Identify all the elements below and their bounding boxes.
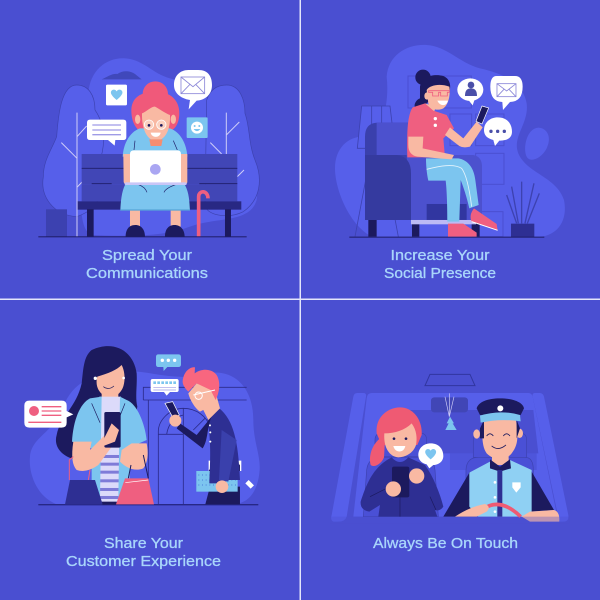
panel: spread your communications — [38, 58, 259, 282]
bubble: dots — [484, 117, 512, 146]
torso — [123, 128, 187, 157]
ears — [473, 429, 480, 439]
dashboard — [330, 517, 570, 523]
windshield — [353, 393, 557, 517]
hair — [56, 346, 137, 460]
woman passenger — [361, 407, 443, 517]
cane — [199, 192, 208, 237]
heading: Share Your — [104, 536, 183, 552]
icon: heart card — [106, 85, 127, 105]
illustration: shoppers with phones — [24, 346, 260, 505]
driver — [443, 398, 559, 522]
jacket — [361, 457, 443, 517]
bag pink — [128, 455, 148, 478]
woman — [56, 346, 154, 505]
panel: share customer experience — [24, 346, 260, 570]
left pillar — [331, 393, 366, 522]
panel: always be on touch — [330, 374, 570, 552]
man — [165, 367, 241, 504]
bench back — [82, 154, 237, 201]
ground — [38, 235, 247, 238]
hair back — [143, 81, 168, 107]
heading: Always Be On Touch — [373, 536, 518, 552]
armchair — [365, 123, 482, 237]
striped top — [99, 397, 121, 502]
face — [97, 365, 125, 397]
rear window — [403, 410, 538, 453]
bench seat and legs — [78, 201, 241, 210]
plant — [507, 182, 539, 237]
arms — [408, 137, 454, 159]
price tag — [245, 480, 254, 489]
laptop — [130, 150, 181, 183]
cardigan — [72, 397, 147, 500]
face — [384, 423, 417, 457]
skirt — [120, 185, 190, 211]
neck and face — [427, 85, 450, 110]
bubble: text — [87, 120, 126, 146]
heading: Increase Your — [390, 248, 490, 264]
arms — [123, 154, 187, 185]
heading — [384, 248, 496, 282]
background blob — [335, 45, 565, 237]
bag navy — [69, 457, 90, 480]
neck and head — [195, 390, 220, 420]
trousers — [205, 487, 240, 504]
heading: Spread Your — [102, 248, 192, 264]
background blob — [81, 58, 257, 236]
legs and shoes — [130, 208, 181, 227]
bubble: mail — [174, 70, 212, 109]
phone — [476, 106, 489, 124]
hair back — [415, 70, 431, 85]
dark sleeves — [443, 472, 554, 517]
ground — [38, 503, 258, 507]
icon: smiley card — [187, 117, 208, 138]
bubble: review left — [24, 401, 73, 428]
bubble: profile — [457, 78, 483, 105]
hanging air freshener — [445, 393, 457, 430]
tree left — [43, 85, 104, 217]
phone — [104, 412, 121, 448]
background blob — [30, 371, 260, 504]
arms — [72, 425, 118, 471]
tree right — [205, 85, 259, 216]
hair — [370, 438, 385, 466]
building outline — [143, 387, 247, 504]
lamp — [355, 106, 398, 237]
woman — [407, 70, 498, 237]
bin — [46, 209, 67, 237]
seats — [363, 433, 533, 517]
small blob — [525, 128, 549, 160]
bubble: heart — [418, 443, 443, 468]
heading: Communications — [86, 266, 208, 282]
illustration: woman in armchair — [335, 45, 565, 238]
illustration: taxi interior — [330, 374, 570, 523]
phone and hand — [165, 402, 179, 418]
woman — [120, 81, 190, 237]
cabinet outlines — [408, 76, 504, 237]
steering wheel — [480, 504, 521, 517]
shirt — [407, 103, 454, 157]
arm — [177, 417, 212, 448]
rear mirror — [425, 374, 475, 386]
legs — [102, 500, 117, 505]
face — [142, 107, 170, 141]
ground — [349, 236, 544, 239]
uniform — [469, 460, 532, 517]
phone — [392, 467, 409, 497]
cap — [477, 398, 524, 415]
heading — [86, 248, 208, 282]
panel: increase social presence — [335, 45, 565, 282]
bubble: mail — [490, 76, 523, 110]
gift box — [196, 471, 238, 492]
hair — [183, 367, 219, 400]
bubble: dots — [156, 354, 181, 371]
hands — [386, 481, 401, 497]
heading — [66, 536, 221, 570]
jeans — [426, 158, 479, 222]
bubble: stars — [151, 379, 179, 396]
cloud — [102, 71, 142, 79]
illustration: woman with laptop on bench — [38, 58, 259, 237]
heading: Social Presence — [384, 266, 496, 282]
branches — [61, 113, 244, 237]
face — [482, 420, 517, 459]
right pillar — [533, 393, 568, 522]
shoes — [448, 224, 477, 237]
heading: Customer Experience — [66, 554, 221, 570]
hands and arms — [455, 504, 559, 522]
torso — [207, 408, 240, 483]
